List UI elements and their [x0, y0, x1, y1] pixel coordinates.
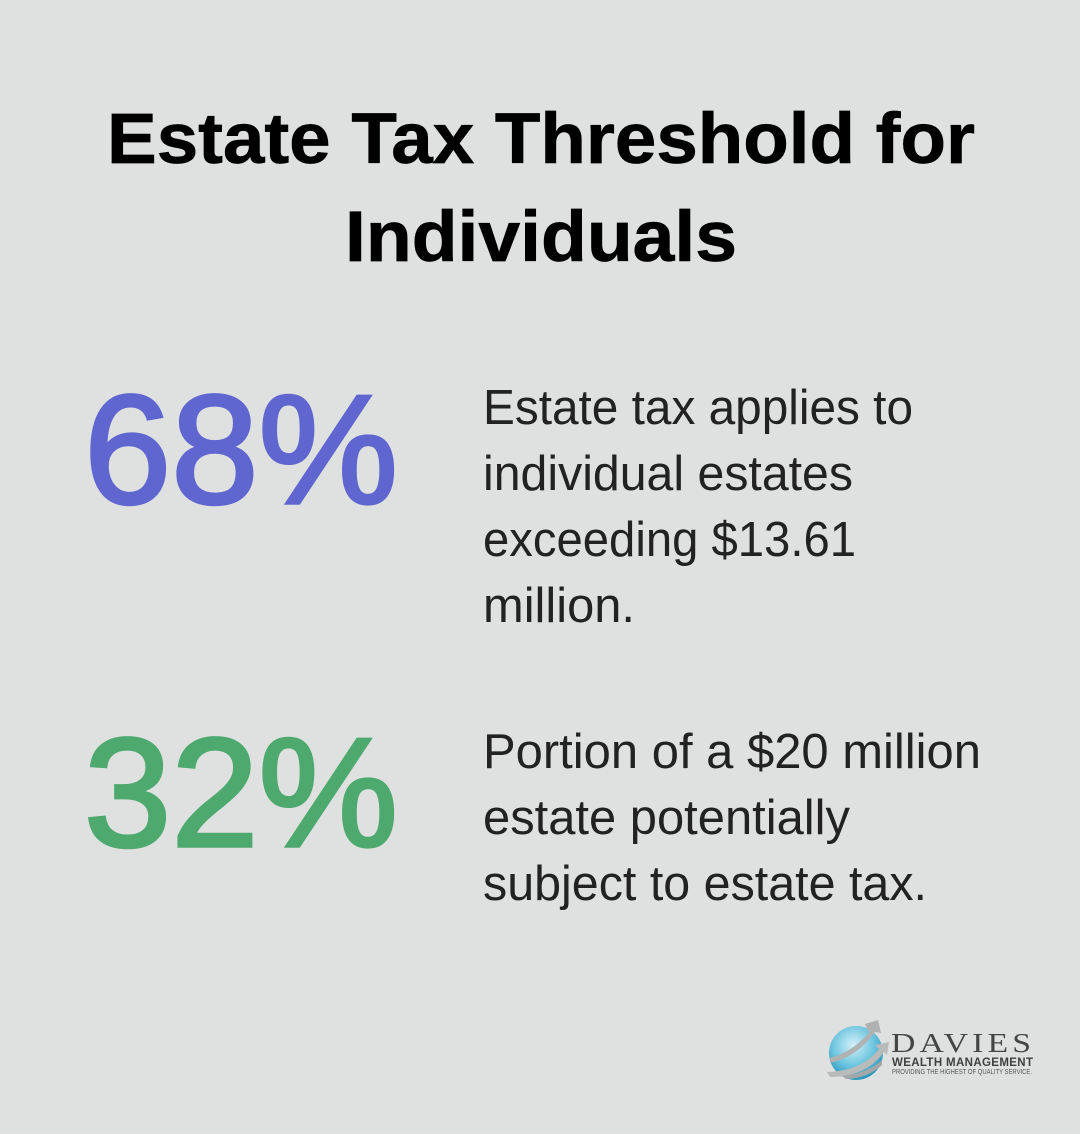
wordmark: PROVIDING THE HIGHEST OF QUALITY SERVICE.	[892, 1069, 1032, 1076]
wordmark: DAVIES	[891, 1028, 1031, 1058]
title: Estate Tax Threshold for	[107, 100, 975, 179]
stat description 68%: Estate tax applies to	[483, 381, 913, 435]
title	[107, 100, 975, 277]
icon: globe with arrows	[827, 1020, 889, 1080]
stat description 68%: million.	[483, 579, 635, 633]
wordmark: WEALTH MANAGEMENT	[892, 1057, 1033, 1069]
stat number 68%: 68%	[84, 363, 398, 536]
stat: 68%	[84, 363, 913, 633]
stat description 32%: subject to estate tax.	[483, 857, 927, 911]
logo: Davies Wealth Management	[827, 1020, 1033, 1080]
stat description 32%: Portion of a $20 million	[483, 725, 981, 779]
stat description 68%	[483, 381, 913, 633]
stat description 68%: individual estates	[483, 447, 853, 501]
stat description 32%: estate potentially	[483, 791, 850, 845]
stat description 32%	[483, 725, 981, 911]
stat description 68%: exceeding $13.61	[483, 513, 856, 567]
title: Individuals	[345, 198, 737, 277]
stat number 32%: 32%	[84, 706, 398, 879]
stat: 32%	[84, 706, 981, 911]
wordmark	[891, 1028, 1033, 1076]
